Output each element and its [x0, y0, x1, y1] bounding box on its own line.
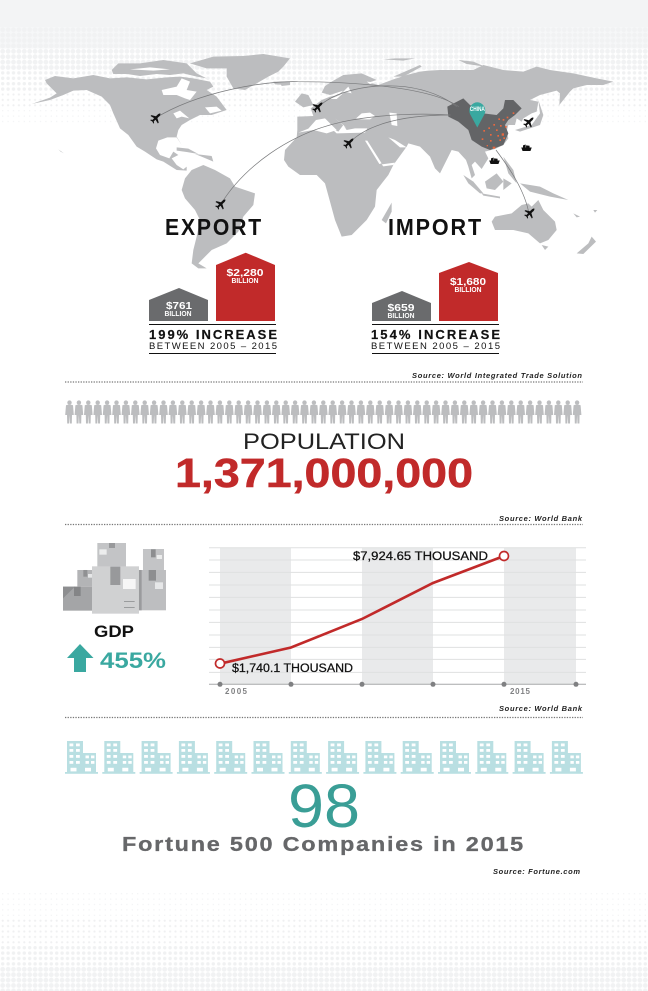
chart: gdp line: $7,924.65 THOUSAND [353, 551, 488, 563]
source: gdp: Source: World Bank [499, 704, 583, 713]
population number: 1,371,000,000 [175, 450, 473, 496]
source: population: Source: World Bank [499, 514, 583, 523]
trade routes [155, 82, 529, 214]
source: fortune: Source: Fortune.com [493, 867, 580, 876]
panel: import bars: BILLION [454, 287, 482, 294]
icon: cargo ships [489, 144, 532, 164]
buildings row [65, 741, 583, 774]
panel: import bars: 154% INCREASE [371, 327, 500, 342]
population people row [65, 400, 581, 424]
icon: location pin china [469, 102, 485, 128]
background: bottom halftone band [0, 891, 648, 991]
world map [32, 54, 613, 268]
heading: population: POPULATION [243, 429, 405, 454]
icon: cardboard boxes [63, 543, 166, 614]
panel: export bars: 199% INCREASE [149, 327, 277, 342]
panel: export bars [149, 253, 277, 354]
panel: import bars: BILLION [388, 313, 414, 320]
panel: export bars: $2,280 [226, 268, 264, 279]
china highlight [447, 98, 522, 150]
panel: export bars: BILLION [164, 311, 192, 318]
chart: gdp line: 2015 [510, 687, 531, 696]
heading: gdp: GDP [94, 623, 134, 641]
panel: import bars: $1,680 [450, 277, 487, 288]
panel: import bars [371, 262, 500, 354]
gdp percent: 455% [100, 648, 166, 673]
panel: export bars: BILLION [232, 278, 258, 285]
source: trade: Source: World Integrated Trade Solution [412, 371, 582, 380]
asia-pacific islands and australia [463, 100, 597, 254]
chart: gdp line: $1,740.1 THOUSAND [232, 663, 353, 675]
fortune number: 98 [288, 772, 360, 840]
icon: up arrow [67, 644, 94, 672]
background: top halftone band [0, 0, 648, 124]
panel: import bars: BETWEEN 2005 – 2015 [371, 341, 500, 352]
icon: airplanes [150, 103, 534, 219]
panel: export bars: $761 [166, 301, 193, 312]
chart: gdp line [209, 548, 586, 696]
afro-eurasia [280, 58, 613, 237]
panel: import bars: $659 [388, 303, 415, 314]
americas [32, 54, 290, 268]
panel: export bars: BETWEEN 2005 – 2015 [149, 341, 277, 352]
icon: location pin china: CHINA [470, 107, 485, 113]
chart: gdp line: 2005 [225, 687, 248, 696]
fortune caption: Fortune 500 Companies in 2015 [122, 834, 525, 856]
heading: export: EXPORT [165, 214, 263, 240]
heading: import: IMPORT [388, 214, 483, 240]
